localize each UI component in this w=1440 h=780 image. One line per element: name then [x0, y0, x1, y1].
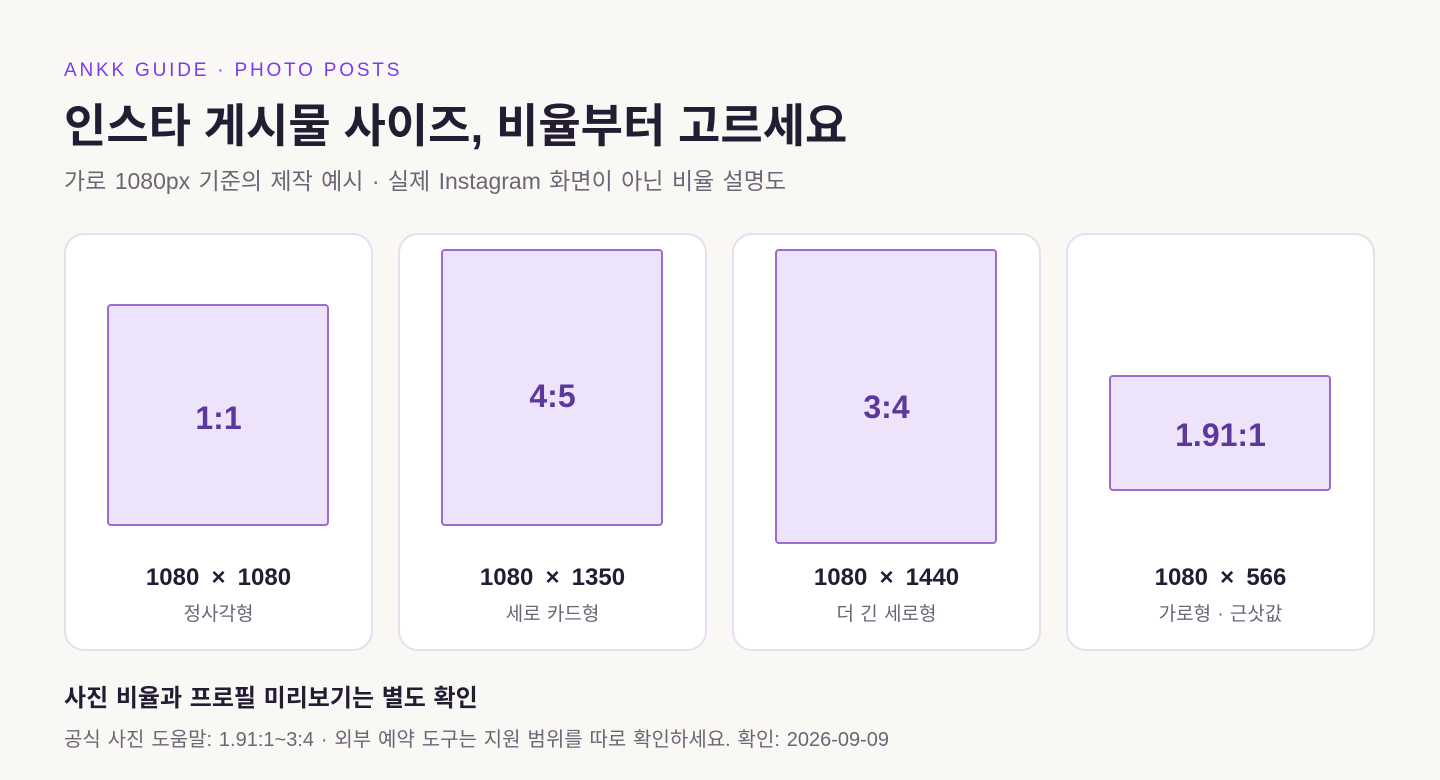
footer note: 공식 사진 도움말: 1.91:1~3:4 · 외부 예약 도구는 지원 범위를 따로 확인하세요. 확인: 2026-09-09 — [64, 729, 889, 751]
ratio label 1:1: 1:1 — [195, 400, 242, 436]
dimensions 1080 x 1440: 1080 × 1440 — [814, 564, 959, 591]
ratio label 4:5: 4:5 — [529, 378, 576, 414]
ratio box 1.91:1 — [1109, 375, 1331, 491]
panel: 3:4 tall portrait — [732, 233, 1041, 651]
dimensions 1080 x 566: 1080 × 566 — [1155, 564, 1286, 591]
dimensions 1080 x 1080: 1080 × 1080 — [146, 564, 291, 591]
caption: landscape approximate: 가로형 · 근삿값 — [1159, 604, 1282, 625]
title: 인스타 게시물 사이즈, 비율부터 고르세요 — [64, 100, 847, 152]
ratio box 1:1 — [107, 304, 329, 526]
caption: taller portrait: 더 긴 세로형 — [837, 604, 936, 625]
panel: 1.91:1 landscape — [1066, 233, 1375, 651]
footer heading: 사진 비율과 프로필 미리보기는 별도 확인 — [64, 685, 478, 712]
panel: 1:1 square — [64, 233, 373, 651]
ratio label 3:4: 3:4 — [863, 389, 910, 425]
caption: square: 정사각형 — [184, 604, 253, 625]
caption: portrait card: 세로 카드형 — [506, 604, 599, 625]
ratio box 4:5 — [441, 249, 663, 526]
eyebrow label: ANKK GUIDE · PHOTO POSTS — [64, 60, 402, 81]
subtitle: 가로 1080px 기준의 제작 예시 · 실제 Instagram 화면이 아닌 비율 설명도 — [64, 168, 786, 194]
ratio label 1.91:1: 1.91:1 — [1175, 417, 1266, 453]
panel: 4:5 portrait — [398, 233, 707, 651]
dimensions 1080 x 1350: 1080 × 1350 — [480, 564, 625, 591]
ratio box 3:4 — [775, 249, 997, 544]
